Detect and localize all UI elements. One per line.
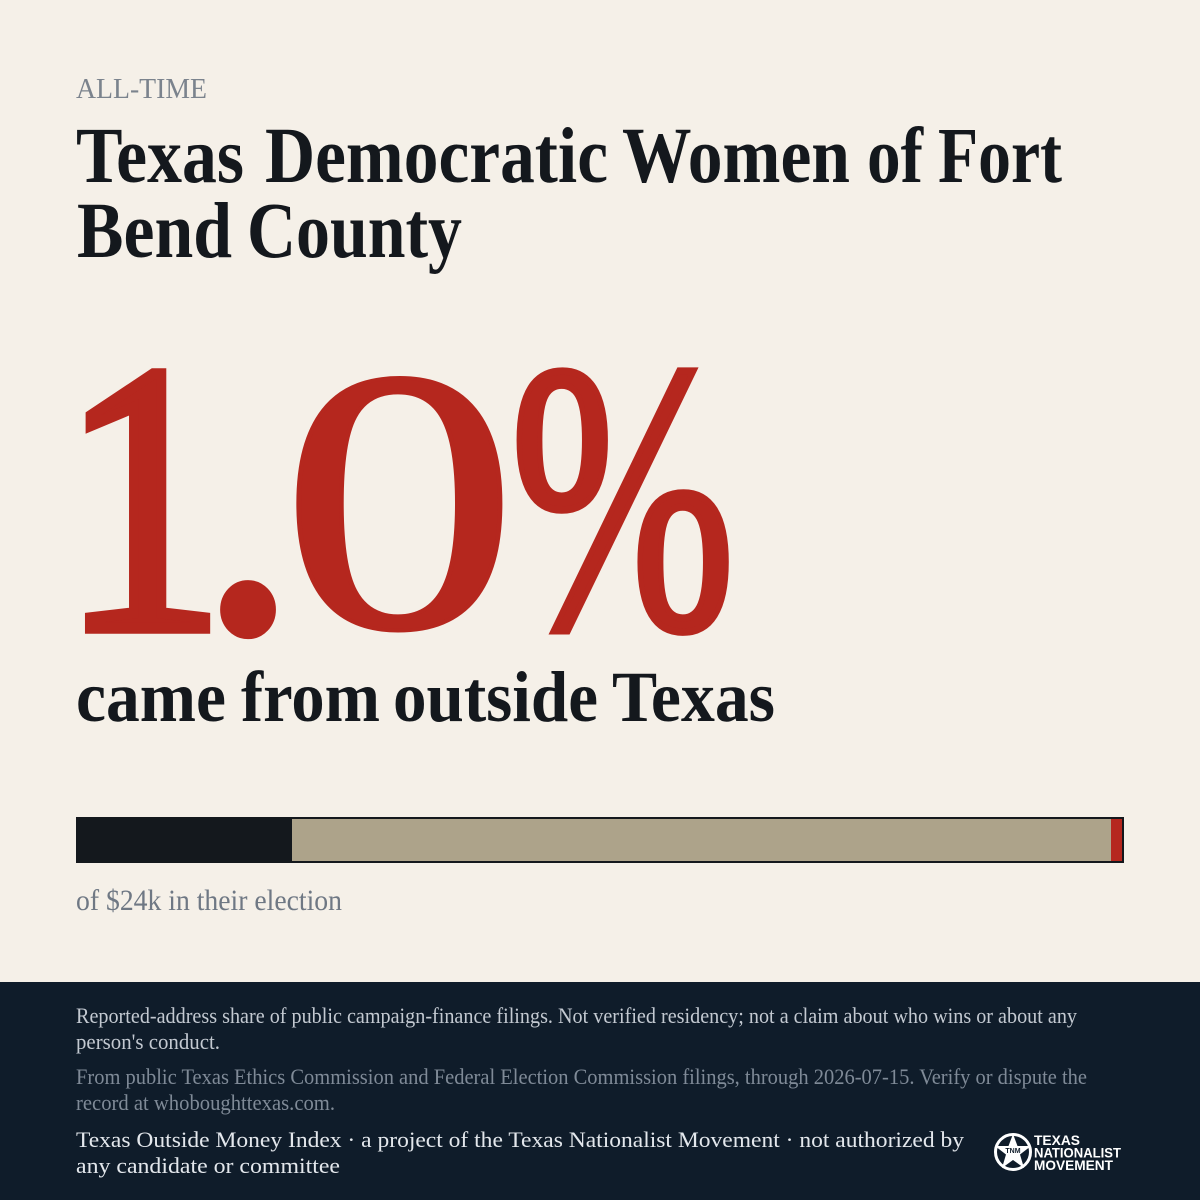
- footer panel: [0, 982, 1200, 1200]
- disclaimer text: person's conduct.: [76, 1029, 220, 1054]
- big statistic: 1.0%: 1: [61, 286, 225, 712]
- bar caption: of $24k in their election: [76, 884, 342, 917]
- disclaimer text: [76, 1003, 1077, 1054]
- title: County: [247, 188, 462, 275]
- title: Democratic: [265, 113, 608, 200]
- title: Fort: [938, 113, 1062, 200]
- logo wordmark: [1034, 1133, 1122, 1173]
- logo wordmark: MOVEMENT: [1034, 1158, 1114, 1173]
- source text: record at whoboughttexas.com.: [76, 1090, 335, 1115]
- big statistic: 1.0%: %: [510, 285, 735, 710]
- bar segment: outside Texas: [1111, 819, 1122, 861]
- title: of: [867, 113, 924, 200]
- logo wordmark: TEXAS: [1034, 1133, 1080, 1148]
- title: Women: [622, 113, 850, 200]
- logo: Texas Nationalist Movement: [995, 1133, 1122, 1173]
- stacked share bar: [76, 817, 1124, 863]
- disclaimer text: Reported-address share of public campaign-finance filings. Not verified residency; not a claim about who wins or about any: [76, 1003, 1077, 1028]
- title: Texas: [76, 113, 244, 200]
- source text: [76, 1064, 1087, 1115]
- statistic caption: came: [76, 657, 226, 737]
- big statistic: 1.0%: .: [205, 309, 291, 713]
- statistic caption: from: [241, 657, 380, 737]
- statistic caption: Texas: [612, 657, 775, 737]
- statistic caption: outside: [393, 657, 598, 737]
- attribution text: [76, 1127, 964, 1178]
- icon: star in circle: TNM: [1005, 1148, 1021, 1155]
- source text: From public Texas Ethics Commission and Federal Election Commission filings, through 2026-07-15. Verify or dispute the: [76, 1064, 1087, 1089]
- big statistic: 1.0%: [61, 285, 735, 713]
- title: [76, 113, 1062, 275]
- eyebrow: all-time: ALL-TIME: [76, 74, 207, 105]
- title: Bend: [77, 188, 232, 275]
- attribution text: Texas Outside Money Index · a project of the Texas Nationalist Movement · not authorized by: [76, 1127, 964, 1152]
- attribution text: any candidate or committee: [76, 1153, 340, 1178]
- logo wordmark: NATIONALIST: [1034, 1146, 1122, 1160]
- big statistic: 1.0%: 0: [281, 293, 518, 708]
- bar segment: other share: [292, 819, 1111, 861]
